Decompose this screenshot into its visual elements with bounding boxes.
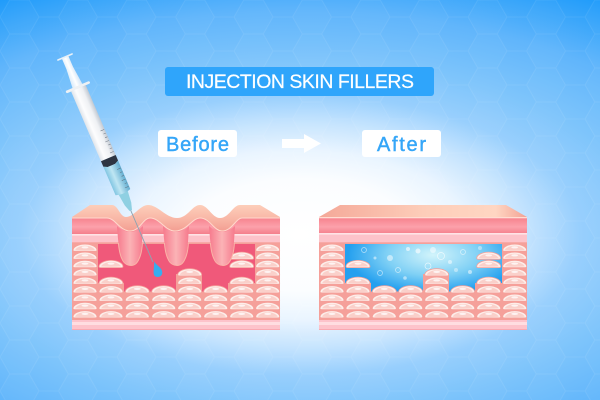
barrel flange	[65, 81, 90, 93]
surface highlight line	[72, 218, 280, 231]
bottom skin layer	[72, 320, 280, 330]
label: before: Before	[166, 134, 229, 156]
filler gel	[345, 244, 502, 292]
dermis layer	[72, 218, 280, 234]
light band	[72, 234, 280, 244]
light band	[319, 233, 527, 244]
label: after: After	[377, 134, 426, 156]
dermis layer	[319, 218, 527, 234]
title: INJECTION SKIN FILLERS	[186, 71, 414, 93]
label: after	[362, 130, 441, 157]
needle hub	[118, 190, 135, 212]
needle	[130, 208, 153, 262]
plunger cap	[57, 53, 73, 61]
wrinkle gap in tissue	[98, 244, 255, 292]
barrel	[71, 85, 116, 161]
arrow: before to after	[282, 134, 321, 153]
panel: skin before treatment	[72, 205, 280, 330]
collagen cells	[73, 244, 280, 318]
plunger	[60, 55, 83, 89]
bottom skin layer	[319, 320, 527, 330]
wrinkle fold 1	[117, 226, 143, 266]
collagen cells	[320, 244, 527, 318]
black rubber stopper	[101, 155, 119, 169]
title	[165, 67, 434, 96]
skin surface with wrinkles	[72, 205, 280, 231]
scale ticks	[101, 129, 129, 188]
panel: skin after treatment	[319, 205, 527, 330]
icon: syringe	[53, 51, 165, 267]
label: before	[158, 130, 237, 157]
liquid	[103, 160, 131, 197]
wrinkle fold 2	[163, 226, 189, 266]
icon: filler drop	[154, 261, 162, 277]
wrinkle fold 3	[209, 226, 235, 266]
smooth skin surface	[319, 205, 527, 217]
